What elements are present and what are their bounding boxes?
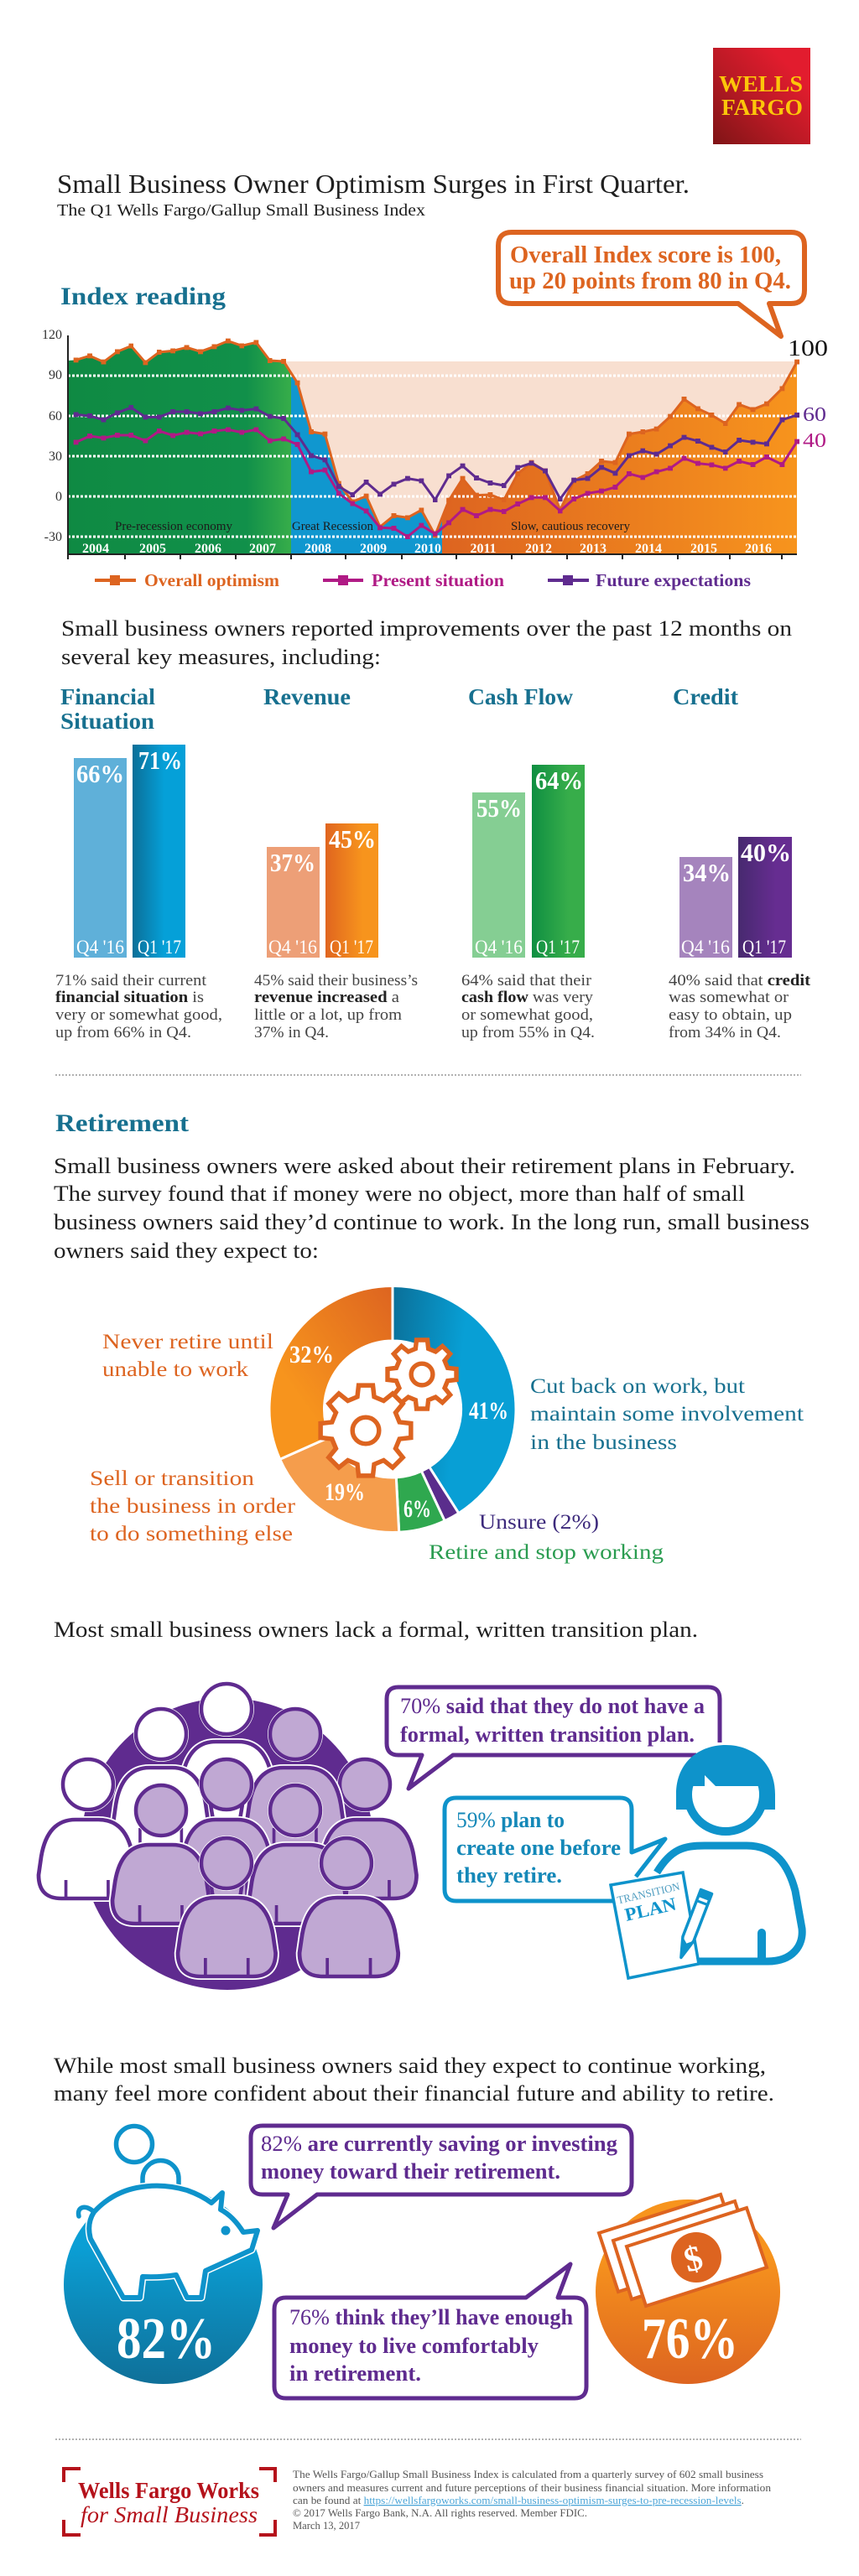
end values (788, 335, 828, 452)
logo: Wells Fargo Works for Small Business: Wells Fargo Works (78, 2478, 259, 2503)
panel: cash flow: Q1 '17 (536, 937, 580, 958)
footnote: © 2017 Wells Fargo Bank, N.A. All rights reserved. Member FDIC. (293, 2506, 587, 2519)
panel: financial situation: Q1 '17 (138, 937, 181, 958)
callout: 59% plan to create: create one before (456, 1836, 621, 1860)
donut label: sell or transition: to do something else (90, 1523, 293, 1545)
panel: financial situation: 71% said their current (55, 972, 207, 989)
callout: 82% saving: money toward their retirement. (261, 2159, 560, 2184)
text: retirement intro (54, 1154, 810, 1263)
text: retirement intro: owners said they expect to: (54, 1239, 319, 1263)
panel: cash flow: 64% said that their (461, 972, 592, 989)
icon: person with transition plan (611, 1745, 802, 1978)
panel: revenue: Revenue (263, 684, 351, 709)
callout: overall index score (498, 232, 804, 336)
panel: cash flow: or somewhat good, (461, 1006, 593, 1024)
footnote: March 13, 2017 (293, 2519, 360, 2532)
line: present situation (76, 429, 797, 537)
donut label: never retire: unable to work (102, 1358, 249, 1381)
panel: credit (669, 684, 811, 1041)
logo: Wells Fargo: FARGO (721, 95, 803, 120)
text: retirement intro: The survey found that if money were no object, more than half of small (54, 1182, 745, 1206)
panel: revenue: little or a lot, up from (254, 1006, 402, 1024)
panel: revenue: Q4 '16 (268, 937, 317, 958)
segment: 19% (280, 1437, 399, 1533)
end values: 40 (803, 430, 826, 452)
footnote: owners and measures current and future perceptions of their business financial situation. More information (293, 2481, 772, 2494)
panel: credit: 40% (741, 838, 791, 867)
chart: index reading area and line chart (42, 327, 828, 559)
era labels: Pre-recession economy (115, 520, 232, 533)
callout: 59% plan to create (445, 1798, 665, 1901)
icon: money stack 76%: 76% (642, 2307, 738, 2371)
donut label: sell or transition (90, 1467, 296, 1545)
footnote: can be found at https://wellsfargoworks.com/small-business-optimism-surges-to-pre-recession-levels . (293, 2494, 744, 2506)
text: improvements intro (61, 616, 792, 669)
y axis labels: 60 (49, 409, 62, 423)
donut label: never retire (102, 1331, 273, 1381)
panel: credit: Credit (673, 684, 738, 709)
text: transition plan intro: Most small business owners lack a formal, written transition plan. (54, 1618, 698, 1642)
callout: 59% plan to create: 59% plan to (456, 1808, 565, 1832)
donut label: cut back (530, 1375, 804, 1454)
era labels: Slow, cautious recovery (511, 520, 630, 533)
icon: person with transition plan: PLAN (622, 1893, 678, 1925)
panel: financial situation: 71% (138, 745, 182, 775)
panel: financial situation: Q4 '16 (76, 937, 124, 958)
callout: 76% comfortable: money to live comfortably (289, 2334, 539, 2358)
year labels: 2012 (525, 542, 552, 556)
panel: financial situation: up from 66% in Q4. (55, 1024, 191, 1041)
panel: credit: was somewhat or (669, 989, 789, 1006)
end values: 60 (803, 404, 826, 426)
panel: credit: 40% said that credit (669, 972, 811, 989)
callout: 82% saving (251, 2126, 632, 2228)
y axis labels: 120 (42, 328, 62, 342)
panel: credit: easy to obtain, up (669, 1006, 792, 1024)
year labels: 2008 (305, 542, 331, 556)
callout: 70% no plan (387, 1687, 720, 1789)
panel: revenue: Q1 '17 (330, 937, 373, 958)
icon: money stack 76%: $ (680, 2239, 707, 2280)
donut label: cut back: in the business (530, 1431, 677, 1454)
panel: credit: Q1 '17 (742, 937, 786, 958)
logo: Wells Fargo: WELLS (719, 71, 803, 96)
text: improvements intro: several key measures, including: (61, 645, 381, 669)
panel: revenue: 37% (270, 848, 315, 877)
footnote: The Wells Fargo/Gallup Small Business Index is calculated from a quarterly survey of 602 small business (293, 2468, 763, 2480)
icon: person with transition plan: TRANSITION (616, 1880, 681, 1906)
donut label: cut back: Cut back on work, but (530, 1375, 745, 1398)
text: confidence intro: many feel more confident about their financial future and ability to retire. (54, 2081, 774, 2106)
text: confidence intro: While most small business owners said they expect to continue working, (54, 2054, 766, 2078)
panel: financial situation: Situation (60, 709, 154, 734)
callout: 82% saving: 82% are currently saving or investing (261, 2132, 617, 2156)
legend (95, 570, 751, 590)
year labels: 2006 (195, 542, 221, 556)
end values: 100 (788, 335, 828, 361)
callout: 76% comfortable: 76% think they’ll have enough (289, 2305, 574, 2329)
callout: 70% no plan: 70% said that they do not have a (400, 1694, 705, 1718)
heading: Retirement: Retirement (55, 1109, 189, 1137)
footnote (293, 2468, 772, 2532)
y axis labels: 90 (49, 368, 62, 382)
text: improvements intro: Small business owners reported improvements over the past 12 months on (61, 616, 792, 641)
panel: revenue: 45% (329, 824, 376, 854)
panel: financial situation (55, 684, 222, 1041)
panel: cash flow: 55% (476, 793, 522, 823)
era labels (115, 520, 630, 533)
icon: piggy bank 82% (64, 2127, 263, 2384)
icon: group of business owners (39, 1681, 416, 1990)
y axis labels: -30 (44, 530, 62, 544)
year labels: 2015 (690, 542, 717, 556)
line: future expectations (76, 408, 797, 500)
donut label: sell or transition: the business in order (90, 1495, 296, 1518)
y axis labels: 0 (55, 490, 62, 504)
icon: gears (320, 1340, 456, 1476)
title: Small Business Owner Optimism Surges in First Quarter. (57, 169, 690, 199)
year labels: 2010 (414, 542, 441, 556)
callout: 76% comfortable: in retirement. (289, 2361, 421, 2386)
icon: piggy bank 82%: 82% (117, 2307, 216, 2371)
year labels: 2009 (360, 542, 387, 556)
y axis labels: 30 (49, 449, 62, 464)
panel: credit: 34% (683, 858, 731, 887)
donut label: cut back: maintain some involvement (530, 1403, 804, 1426)
callout: overall index score: up 20 points from 80 in Q4. (509, 268, 791, 294)
donut label: never retire: Never retire until (102, 1331, 273, 1353)
logo: Wells Fargo Works for Small Business: for Small Business (81, 2502, 258, 2527)
donut label: retire and stop: Retire and stop working (429, 1541, 664, 1564)
callout: 76% comfortable (274, 2264, 586, 2398)
panel: financial situation: very or somewhat good, (55, 1006, 222, 1024)
panel: revenue: 37% in Q4. (254, 1024, 329, 1041)
panel: cash flow: 64% (535, 766, 583, 795)
legend: Future expectations (596, 570, 751, 590)
year labels (82, 542, 772, 556)
panel: cash flow (461, 684, 595, 1041)
line: overall optimism (76, 341, 797, 535)
donut label: unsure: Unsure (2%) (479, 1511, 599, 1534)
donut values: 32% (289, 1341, 334, 1368)
panel: cash flow: Q4 '16 (475, 937, 523, 958)
panel: credit: from 34% in Q4. (669, 1024, 781, 1041)
text: retirement intro: Small business owners were asked about their retirement plans in February. (54, 1154, 795, 1178)
y axis labels (42, 328, 62, 544)
year labels: 2005 (139, 542, 166, 556)
year labels: 2013 (580, 542, 607, 556)
panel: cash flow: Cash Flow (468, 684, 574, 709)
donut values (289, 1341, 508, 1523)
segment: 32% (269, 1286, 393, 1459)
segment: 2% (421, 1467, 459, 1521)
callout: 59% plan to create: they retire. (456, 1863, 562, 1888)
donut values: 6% (403, 1495, 431, 1523)
year labels: 2004 (82, 542, 109, 556)
year labels: 2014 (635, 542, 662, 556)
panel: revenue: revenue increased a (254, 989, 400, 1006)
subtitle: The Q1 Wells Fargo/Gallup Small Business Index (57, 201, 425, 220)
year labels: 2016 (745, 542, 772, 556)
heading: Index reading: Index reading (60, 283, 226, 310)
panel: financial situation: financial situation is (55, 989, 204, 1006)
panel: cash flow: cash flow was very (461, 989, 594, 1006)
legend: Overall optimism (144, 570, 280, 590)
text: confidence intro (54, 2054, 774, 2106)
era labels: Great Recession (292, 520, 373, 533)
logo: Wells Fargo Works for Small Business (64, 2469, 275, 2535)
donut values: 19% (325, 1478, 365, 1506)
callout: 70% no plan: formal, written transition plan. (400, 1722, 695, 1747)
axis (68, 335, 797, 559)
chart: retirement donut (269, 1286, 516, 1533)
panel: revenue: 45% said their business’s (254, 972, 418, 989)
legend: Present situation (372, 570, 504, 590)
donut label: sell or transition: Sell or transition (90, 1467, 255, 1490)
panel: financial situation: Financial (60, 684, 156, 709)
logo: Wells Fargo (713, 48, 810, 144)
donut values: 41% (469, 1397, 508, 1425)
panel: cash flow: up from 55% in Q4. (461, 1024, 595, 1041)
panel: financial situation: 66% (76, 759, 124, 788)
panel: revenue (254, 684, 418, 1041)
segment: 41% (393, 1286, 516, 1514)
icon: money stack 76% (596, 2194, 780, 2384)
panel: credit: Q4 '16 (681, 937, 730, 958)
text: retirement intro: business owners said they’d continue to work. In the long run, small business (54, 1210, 810, 1234)
callout: overall index score: Overall Index score is 100, (510, 242, 781, 268)
year labels: 2011 (470, 542, 497, 556)
year labels: 2007 (249, 542, 276, 556)
segment: 6% (396, 1471, 445, 1532)
